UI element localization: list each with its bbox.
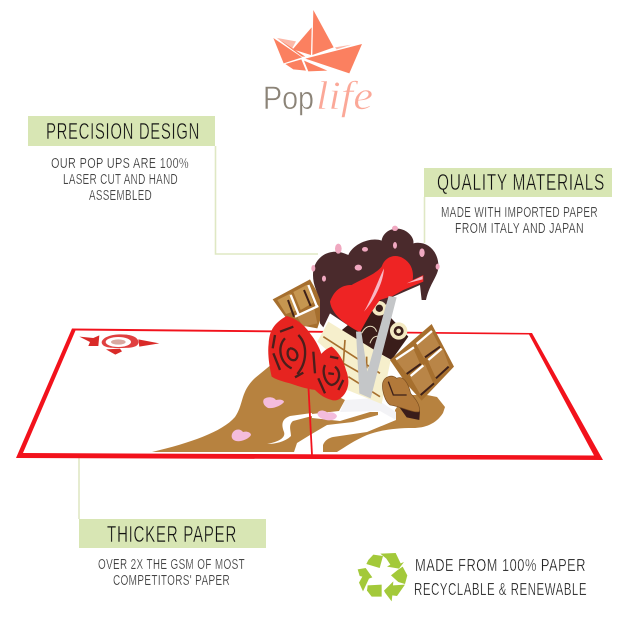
description: OUR POP UPS ARE 100% — [51, 156, 189, 172]
description — [51, 156, 189, 204]
heading band — [79, 519, 266, 548]
brown melted chocolate base — [152, 364, 378, 452]
description: OVER 2X THE GSM OF MOST — [98, 557, 245, 573]
hearts on base — [232, 397, 337, 441]
centerpiece: zoomed coordinate group — [268, 226, 454, 420]
centre fold — [308, 388, 312, 455]
white swirl — [267, 413, 312, 444]
dark rolled chocolate — [340, 298, 408, 360]
description — [98, 557, 245, 589]
description: COMPETITORS' PAPER — [113, 573, 230, 589]
white chocolate bar — [317, 322, 391, 404]
front chocolate bar — [390, 324, 454, 401]
brown strand and blob — [323, 395, 445, 452]
grey paper support — [356, 296, 397, 398]
dark chocolate heart — [313, 229, 439, 333]
paper shadow under centrepiece — [340, 398, 396, 420]
logo wordmark: Pop — [263, 80, 314, 116]
icon: corner rose — [79, 334, 159, 355]
pink sprinkles — [311, 226, 440, 282]
callout: quality materials — [424, 168, 612, 237]
back chocolate bar — [273, 279, 325, 328]
logo: Poplife — [263, 10, 373, 118]
callout: thicker paper — [79, 519, 266, 589]
description: LASER CUT AND HAND — [63, 172, 178, 188]
heading band — [28, 116, 215, 146]
callout: precision design — [28, 116, 215, 204]
description — [441, 205, 598, 237]
small chocolate heart — [382, 376, 420, 420]
icon: recycling symbol — [358, 553, 407, 601]
pop-up card illustration — [16, 226, 603, 460]
connector lines — [79, 146, 424, 519]
red heart — [330, 256, 423, 332]
icon: origami boat — [273, 10, 362, 73]
description: ASSEMBLED — [89, 188, 152, 204]
red roses — [268, 316, 348, 400]
card frame — [16, 328, 603, 460]
heading band — [424, 168, 612, 197]
pink heart highlights — [364, 268, 423, 312]
logo: Poplife: life — [316, 73, 373, 118]
heading: THICKER PAPER — [107, 521, 237, 547]
heading: PRECISION DESIGN — [46, 118, 200, 144]
rose petal cuts — [273, 327, 343, 393]
text: made from 100% paper — [414, 555, 587, 599]
